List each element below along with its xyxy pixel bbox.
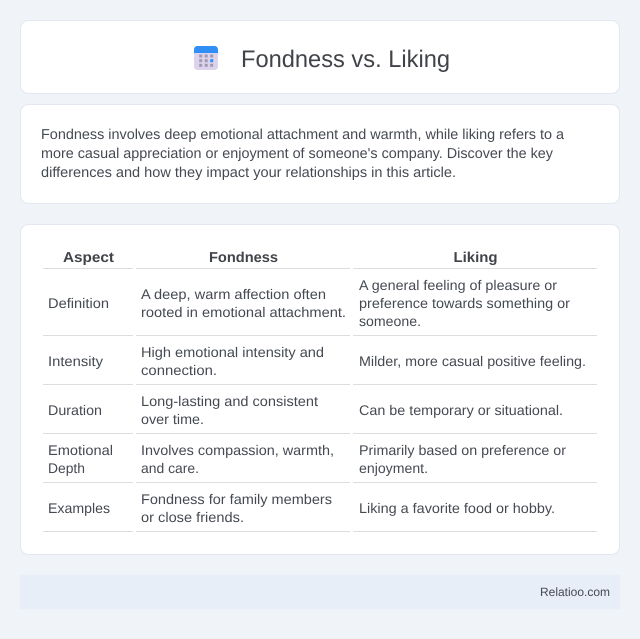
- row: intensity: Intensity: [48, 353, 103, 369]
- row: emotional depth: and care.: [141, 460, 199, 476]
- panel: comparison table: [20, 224, 620, 554]
- row: intensity: Milder, more casual positive feeling.: [359, 353, 586, 369]
- table header row: Aspect: [63, 250, 114, 266]
- intro text: Fondness involves deep emotional attachment and warmth, while liking refers to a: [41, 127, 564, 143]
- row: duration: [43, 393, 597, 434]
- row: duration: over time.: [141, 411, 204, 427]
- row: intensity: High emotional intensity and: [141, 344, 324, 360]
- intro text: differences and how they impact your relationships in this article.: [41, 165, 456, 181]
- row: emotional depth: enjoyment.: [359, 460, 428, 476]
- row: emotional depth: [43, 442, 597, 482]
- panel: introduction: [20, 104, 620, 204]
- row: definition: Definition: [48, 295, 109, 311]
- row: definition: A general feeling of pleasure or: [359, 277, 557, 293]
- icon: calendar: [194, 46, 218, 70]
- row: intensity: connection.: [141, 362, 217, 378]
- intro text: [41, 127, 564, 181]
- title: Fondness vs. Liking: [241, 46, 450, 73]
- table header row: Fondness: [209, 250, 278, 266]
- row: emotional depth: Involves compassion, warmth,: [141, 442, 334, 458]
- row: definition: preference towards something or: [359, 295, 570, 311]
- table header row: [43, 250, 597, 268]
- panel: title header: [20, 20, 620, 94]
- row: emotional depth: Primarily based on preference or: [359, 442, 566, 458]
- row: emotional depth: Emotional: [48, 442, 113, 458]
- row: definition: A deep, warm affection often: [141, 286, 326, 302]
- row: examples: Liking a favorite food or hobby.: [359, 500, 555, 516]
- row: examples: Fondness for family members: [141, 491, 332, 507]
- intro text: more casual appreciation or enjoyment of someone's company. Discover the key: [41, 146, 554, 162]
- row: definition: someone.: [359, 313, 421, 329]
- row: emotional depth: Depth: [48, 460, 85, 476]
- row: intensity: [43, 344, 597, 384]
- row: definition: rooted in emotional attachment.: [141, 304, 346, 320]
- row: definition: [43, 277, 597, 336]
- table header row: Liking: [454, 250, 498, 266]
- footer: [20, 575, 620, 609]
- row: duration: Can be temporary or situational.: [359, 402, 563, 418]
- footer credit: Relatioo.com: [540, 585, 610, 599]
- row: duration: Long-lasting and consistent: [141, 393, 318, 409]
- row: examples: Examples: [48, 500, 110, 516]
- row: examples: [43, 491, 597, 532]
- row: duration: Duration: [48, 402, 102, 418]
- row: examples: or close friends.: [141, 509, 244, 525]
